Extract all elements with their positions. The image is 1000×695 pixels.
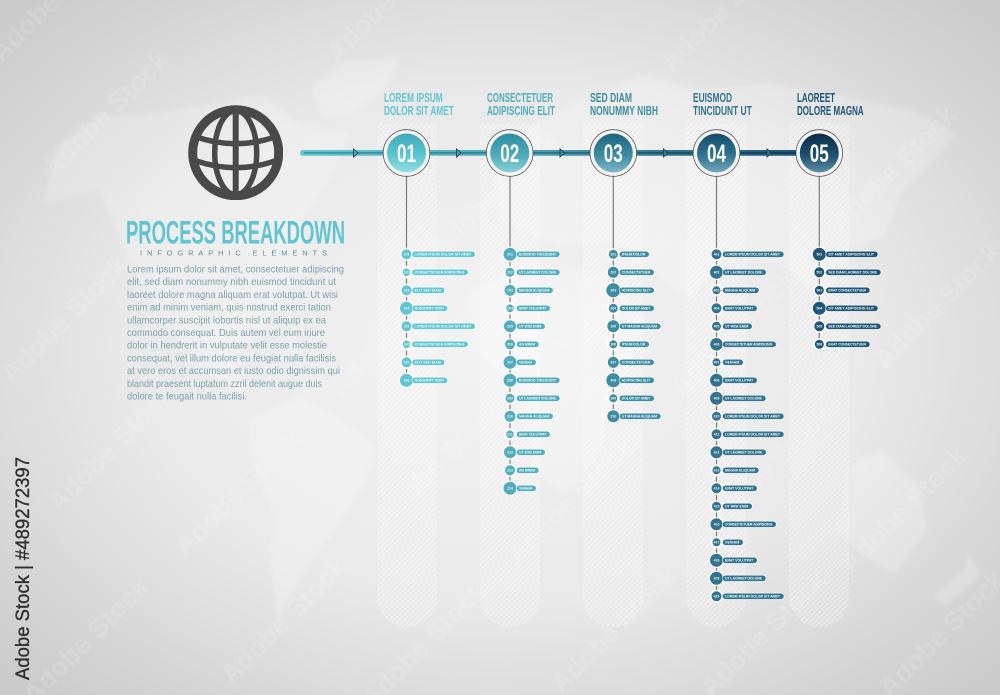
item 416: CONSECTETUER ADIPISCING — [725, 523, 773, 527]
item 214: VENIAM — [519, 487, 532, 491]
item 207: VENIAM — [519, 361, 532, 365]
item 304: DOLOR SIT AMET — [622, 307, 651, 311]
body text: at vero eros et accumsan et iusto odio dignissim qui — [127, 365, 340, 377]
item 204: 204 — [507, 306, 513, 310]
item 401 — [710, 248, 784, 261]
item 402: 402 — [714, 270, 719, 274]
item 105 — [400, 320, 475, 333]
column 3 — [590, 90, 661, 424]
item 211 — [504, 428, 550, 441]
body text: enim ad minim veniam, quis nostrud exerci tation — [127, 302, 331, 314]
item 408: ERAT VOLUTPAT — [725, 379, 754, 383]
item 205 — [503, 319, 545, 334]
connector line — [818, 176, 820, 344]
watermark: Adobe Stock: Adobe Stock — [425, 124, 563, 263]
step badge 02 — [486, 130, 533, 176]
step badge 04: 04 — [707, 140, 726, 168]
icon: globe — [193, 110, 279, 196]
item 308 — [605, 372, 654, 388]
item 417 — [710, 536, 743, 548]
item 105: LOREM IPSUM DOLOR SIT AMET — [414, 325, 472, 329]
item 406: 406 — [714, 342, 719, 346]
item 107: 107 — [404, 360, 409, 364]
item 310 — [606, 409, 661, 424]
step badge 05: 05 — [810, 140, 829, 168]
item 404: 404 — [714, 306, 719, 310]
heading 4: EUISMOD — [693, 90, 732, 105]
item 409 — [709, 390, 766, 406]
item 506: 506 — [816, 342, 822, 346]
item 411: LOREM IPSUM DOLOR SIT AMET — [725, 433, 781, 437]
item 203 — [503, 283, 553, 297]
item 416: 416 — [714, 522, 719, 526]
item 209: 209 — [507, 396, 513, 400]
item 106 — [400, 338, 468, 351]
watermark: Adobe Stock: Adobe Stock — [835, 440, 973, 579]
item 411 — [710, 428, 784, 441]
item 502: SED DIAM LAOREET DOLORE — [828, 271, 878, 275]
heading 1: DOLOR SIT AMET — [384, 103, 454, 118]
item 402: UT LAOREET DOLORE — [725, 271, 763, 275]
connector line — [406, 176, 408, 380]
item 202 — [504, 266, 560, 279]
item 502: 502 — [816, 270, 822, 274]
item 202: 202 — [507, 270, 513, 274]
item 309: 309 — [610, 396, 616, 400]
item 210: MAGNA ALIQUAM — [519, 415, 549, 419]
subtitle: INFOGRAPHIC ELEMENTS — [140, 248, 327, 258]
heading 2 — [487, 90, 555, 118]
item 415: UT WISI ENIM — [725, 505, 748, 509]
item 108 — [399, 372, 448, 388]
body text: laoreet dolore magna aliquam erat volutpat. Ut wisi — [127, 289, 338, 301]
item 410: 410 — [714, 414, 719, 418]
item 302: 302 — [610, 270, 616, 274]
item 307: CONSECTETUER — [622, 361, 651, 365]
item 406 — [709, 337, 776, 352]
item 503 — [813, 284, 870, 296]
item 403: 403 — [714, 288, 719, 292]
step badge 03 — [590, 130, 637, 176]
item 107 — [400, 356, 444, 369]
item 505: 505 — [816, 324, 822, 328]
item 413 — [710, 464, 759, 476]
step badge 02: 02 — [500, 140, 519, 168]
watermark: Adobe Stock: Adobe Stock — [700, 398, 838, 537]
watermark: Adobe Stock: Adobe Stock — [325, 264, 463, 403]
timeline bar — [300, 150, 820, 156]
column 4 — [693, 90, 784, 603]
item 503: ERAT CONSECTETUER — [828, 289, 866, 293]
item 409: 409 — [714, 396, 719, 400]
item 301: 301 — [610, 253, 616, 257]
item 412: 412 — [714, 450, 719, 454]
step badge 01 — [383, 130, 430, 176]
item 304: 304 — [610, 306, 616, 310]
watermark: Adobe Stock: Adobe Stock — [37, 44, 175, 183]
heading 3: NONUMMY NIBH — [590, 103, 658, 118]
heading 3 — [590, 90, 658, 118]
item 310: UT MAGNA ALIQUAM — [622, 415, 657, 419]
item 405: UT WISI ENIM — [725, 325, 748, 329]
item 305 — [606, 319, 661, 334]
item 302 — [606, 265, 654, 279]
item 202: UT LAOREET DOLORE — [519, 271, 557, 275]
item 106: CONSECTETUER ADIPISCING — [414, 343, 465, 347]
item 206 — [503, 338, 539, 351]
item 307 — [606, 355, 654, 369]
item 310: 310 — [610, 414, 616, 418]
title: PROCESS BREAKDOWN — [126, 214, 345, 250]
item 101: LOREM IPSUM DOLOR SIT AMET — [414, 253, 472, 257]
item 101 — [400, 248, 475, 261]
item 415 — [710, 500, 752, 512]
watermark: Adobe Stock: Adobe Stock — [42, 379, 180, 518]
watermark: Adobe Stock: Adobe Stock — [537, 225, 675, 364]
side label: stock number: Adobe Stock | #489272397 — [13, 457, 34, 680]
item 213: AD MINIM — [519, 469, 535, 473]
item 214: 214 — [507, 486, 513, 490]
step badge 01: 01 — [397, 140, 416, 168]
watermark: Adobe Stock: Adobe Stock — [502, 431, 640, 570]
item 101: 101 — [404, 253, 409, 257]
item 108: 108 — [404, 378, 409, 382]
list items — [709, 248, 784, 603]
connector line — [716, 176, 718, 596]
body text: consequat, vel illum dolore eu feugiat nulla facilisis — [127, 352, 336, 364]
watermark: Adobe Stock: Adobe Stock — [370, 394, 508, 533]
body text: blandit praesent luptatum zzril delenit augue duis — [127, 378, 322, 390]
item 104: 104 — [404, 306, 409, 310]
item 414 — [710, 482, 757, 495]
heading 1 — [384, 90, 454, 118]
item 420: 420 — [714, 594, 719, 598]
item 106: 106 — [404, 342, 409, 346]
heading 5: LAOREET — [797, 90, 835, 105]
item 108: NONUMMY NIBH — [414, 379, 444, 383]
item 504 — [812, 300, 878, 316]
heading 3: SED DIAM — [590, 90, 632, 105]
item 212: UT WISI ENIM — [519, 451, 541, 455]
item 205: UT WISI ENIM — [519, 325, 541, 329]
item 306: IPSUM DOLOR — [622, 343, 646, 347]
item 205: 205 — [507, 324, 513, 328]
item 408: 408 — [714, 378, 719, 382]
item 305: UT MAGNA ALIQUAM — [622, 325, 657, 329]
item 102: 102 — [404, 270, 409, 274]
item 415: 415 — [714, 504, 719, 508]
heading 2: ADIPISCING ELIT — [487, 103, 555, 118]
item 414: ERAT VOLUTPAT — [725, 487, 754, 491]
item 308: ADIPISCING ELIT — [622, 379, 651, 383]
item 407 — [710, 356, 743, 368]
item 410 — [710, 410, 784, 422]
item 506: ERAT CONSECTETUER — [828, 343, 866, 347]
item 418: 418 — [714, 558, 719, 562]
item 414: 414 — [714, 486, 719, 490]
item 420: LOREM IPSUM DOLOR SIT AMET — [725, 595, 781, 599]
item 209 — [504, 392, 560, 405]
item 413: MAGNA ALIQUAM — [725, 469, 755, 473]
item 305: 305 — [610, 324, 616, 328]
item 405 — [710, 320, 752, 332]
heading 5 — [797, 90, 864, 118]
step badge 05 — [796, 130, 843, 176]
item 301: IPSUM DOLOR — [622, 253, 646, 257]
item 501 — [812, 246, 878, 262]
world map — [43, 58, 980, 622]
column 1 — [383, 90, 475, 388]
item 403: MAGNA ALIQUAM — [725, 289, 755, 293]
item 308: 308 — [610, 378, 616, 382]
item 201: EUISMOD TINCIDUNT — [519, 253, 557, 257]
item 201: 201 — [507, 253, 513, 257]
item 213 — [503, 464, 539, 477]
item 104 — [399, 300, 448, 316]
item 104: NONUMMY NIBH — [414, 307, 444, 311]
item 404: ERAT VOLUTPAT — [725, 307, 754, 311]
step badge 04 — [693, 130, 740, 176]
heading 4 — [693, 90, 752, 118]
watermark: Adobe Stock: Adobe Stock — [665, 263, 803, 402]
item 204: ERAT VOLUTPAT — [519, 307, 547, 311]
item 505: SED DIAM LAOREET DOLORE — [828, 325, 878, 329]
item 209: UT LAOREET DOLORE — [519, 397, 557, 401]
item 502 — [813, 266, 881, 279]
list items — [399, 248, 475, 388]
item 419: 419 — [714, 576, 719, 580]
item 417: VENIAM — [725, 541, 739, 545]
connector line — [509, 176, 511, 488]
item 416 — [709, 517, 776, 532]
item 413: 413 — [714, 468, 719, 472]
item 210: 210 — [507, 414, 513, 418]
item 407: 407 — [714, 360, 719, 364]
body text: Lorem ipsum dolor sit amet, consectetuer adipiscing — [127, 264, 344, 276]
column 2 — [486, 90, 560, 496]
item 418: ERAT VOLUTPAT — [725, 559, 754, 563]
item 309 — [607, 392, 654, 404]
item 102 — [400, 266, 468, 279]
item 102: CONSECTETUER ADIPISCING — [414, 271, 465, 275]
item 213: 213 — [507, 468, 513, 472]
watermark: Adobe Stock: Adobe Stock — [169, 423, 307, 562]
item 309: DOLOR SIT AMET — [622, 397, 651, 401]
body text: dolor in hendrerit in vulputate velit esse molestie — [127, 340, 327, 352]
item 207: 207 — [507, 360, 513, 364]
item 403 — [710, 284, 759, 296]
watermark: Adobe Stock: Adobe Stock — [825, 99, 963, 238]
item 406: CONSECTETUER ADIPISCING — [725, 343, 773, 347]
item 418 — [709, 552, 757, 568]
body text — [127, 264, 344, 402]
item 206: AD MINIM — [519, 343, 535, 347]
item 107: ELIT SED DIAM — [414, 361, 441, 365]
item 204 — [504, 302, 550, 315]
item 405: 405 — [714, 324, 719, 328]
heading 2: CONSECTETUER — [487, 90, 553, 105]
connector line — [612, 176, 614, 416]
item 411: 411 — [714, 432, 719, 436]
item 203: 203 — [507, 288, 513, 292]
item 409: UT LAOREET DOLORE — [725, 397, 763, 401]
item 208: 208 — [507, 378, 513, 382]
item 412 — [709, 445, 766, 460]
item 206: 206 — [507, 342, 513, 346]
item 208 — [502, 372, 560, 388]
item 103: 103 — [404, 288, 409, 292]
item 306: 306 — [610, 342, 616, 346]
item 401: LOREM IPSUM DOLOR SIT AMET — [725, 253, 781, 257]
item 211: 211 — [507, 432, 513, 436]
item 214 — [502, 480, 536, 496]
item 212 — [503, 445, 545, 460]
item 408 — [709, 372, 757, 388]
item 401: 401 — [714, 253, 719, 257]
watermark: Adobe Stock: Adobe Stock — [215, 551, 353, 690]
item 417: 417 — [714, 540, 719, 544]
body text: commodo consequat. Duis autem vel eum iriure — [127, 327, 325, 339]
body text: ullamcorper suscipit lobortis nisl ut aliquip ex ea — [127, 314, 326, 326]
item 208: EUISMOD TINCIDUNT — [519, 379, 557, 383]
item 301 — [607, 248, 649, 260]
item 402 — [709, 264, 766, 280]
heading 1: LOREM IPSUM — [384, 90, 443, 105]
item 103: ELIT SED DIAM — [414, 289, 441, 293]
item 303: ADIPISCING ELIT — [622, 289, 651, 293]
item 303 — [605, 282, 654, 298]
striped column bands — [377, 123, 849, 627]
item 306 — [607, 338, 649, 350]
item 504: SIT AMET ADIPISCING ELIT — [828, 307, 875, 311]
item 506 — [813, 338, 870, 350]
step badge 03: 03 — [604, 140, 623, 168]
item 410: LOREM IPSUM DOLOR SIT AMET — [725, 415, 781, 419]
item 211: ERAT VOLUTPAT — [519, 433, 547, 437]
watermark: Adobe Stock: Adobe Stock — [545, 560, 683, 695]
list items — [605, 248, 661, 424]
item 419 — [709, 570, 766, 586]
body text: dolore te feugait nulla facilisi. — [127, 390, 247, 402]
item 207 — [502, 354, 536, 370]
item 303: 303 — [610, 288, 616, 292]
item 412: UT LAOREET DOLORE — [725, 451, 763, 455]
item 203: MAGNA ALIQUAM — [519, 289, 549, 293]
item 419: UT LAOREET DOLORE — [725, 577, 763, 581]
item 304 — [607, 302, 654, 314]
item 501: 501 — [816, 253, 822, 257]
item 201 — [502, 246, 560, 262]
item 505 — [813, 320, 881, 333]
list items — [812, 246, 881, 350]
heading 4: TINCIDUNT UT — [693, 103, 752, 118]
item 501: SIT AMET ADIPISCING ELIT — [828, 253, 875, 257]
item 404 — [710, 302, 757, 315]
item 105: 105 — [404, 324, 409, 328]
item 212: 212 — [507, 450, 513, 454]
item 210 — [503, 409, 553, 423]
arrows on timeline — [354, 149, 772, 157]
list items — [502, 246, 560, 496]
item 504: 504 — [816, 306, 822, 310]
item 302: CONSECTETUER — [622, 271, 651, 275]
body text: elit, sed diam nonummy nibh euismod tincidunt ut — [127, 276, 336, 288]
heading 5: DOLORE MAGNA — [797, 103, 864, 118]
item 103 — [400, 284, 444, 297]
column 5 — [796, 90, 881, 350]
item 420 — [710, 590, 784, 603]
item 307: 307 — [610, 360, 616, 364]
item 503: 503 — [816, 288, 822, 292]
item 407: VENIAM — [725, 361, 739, 365]
